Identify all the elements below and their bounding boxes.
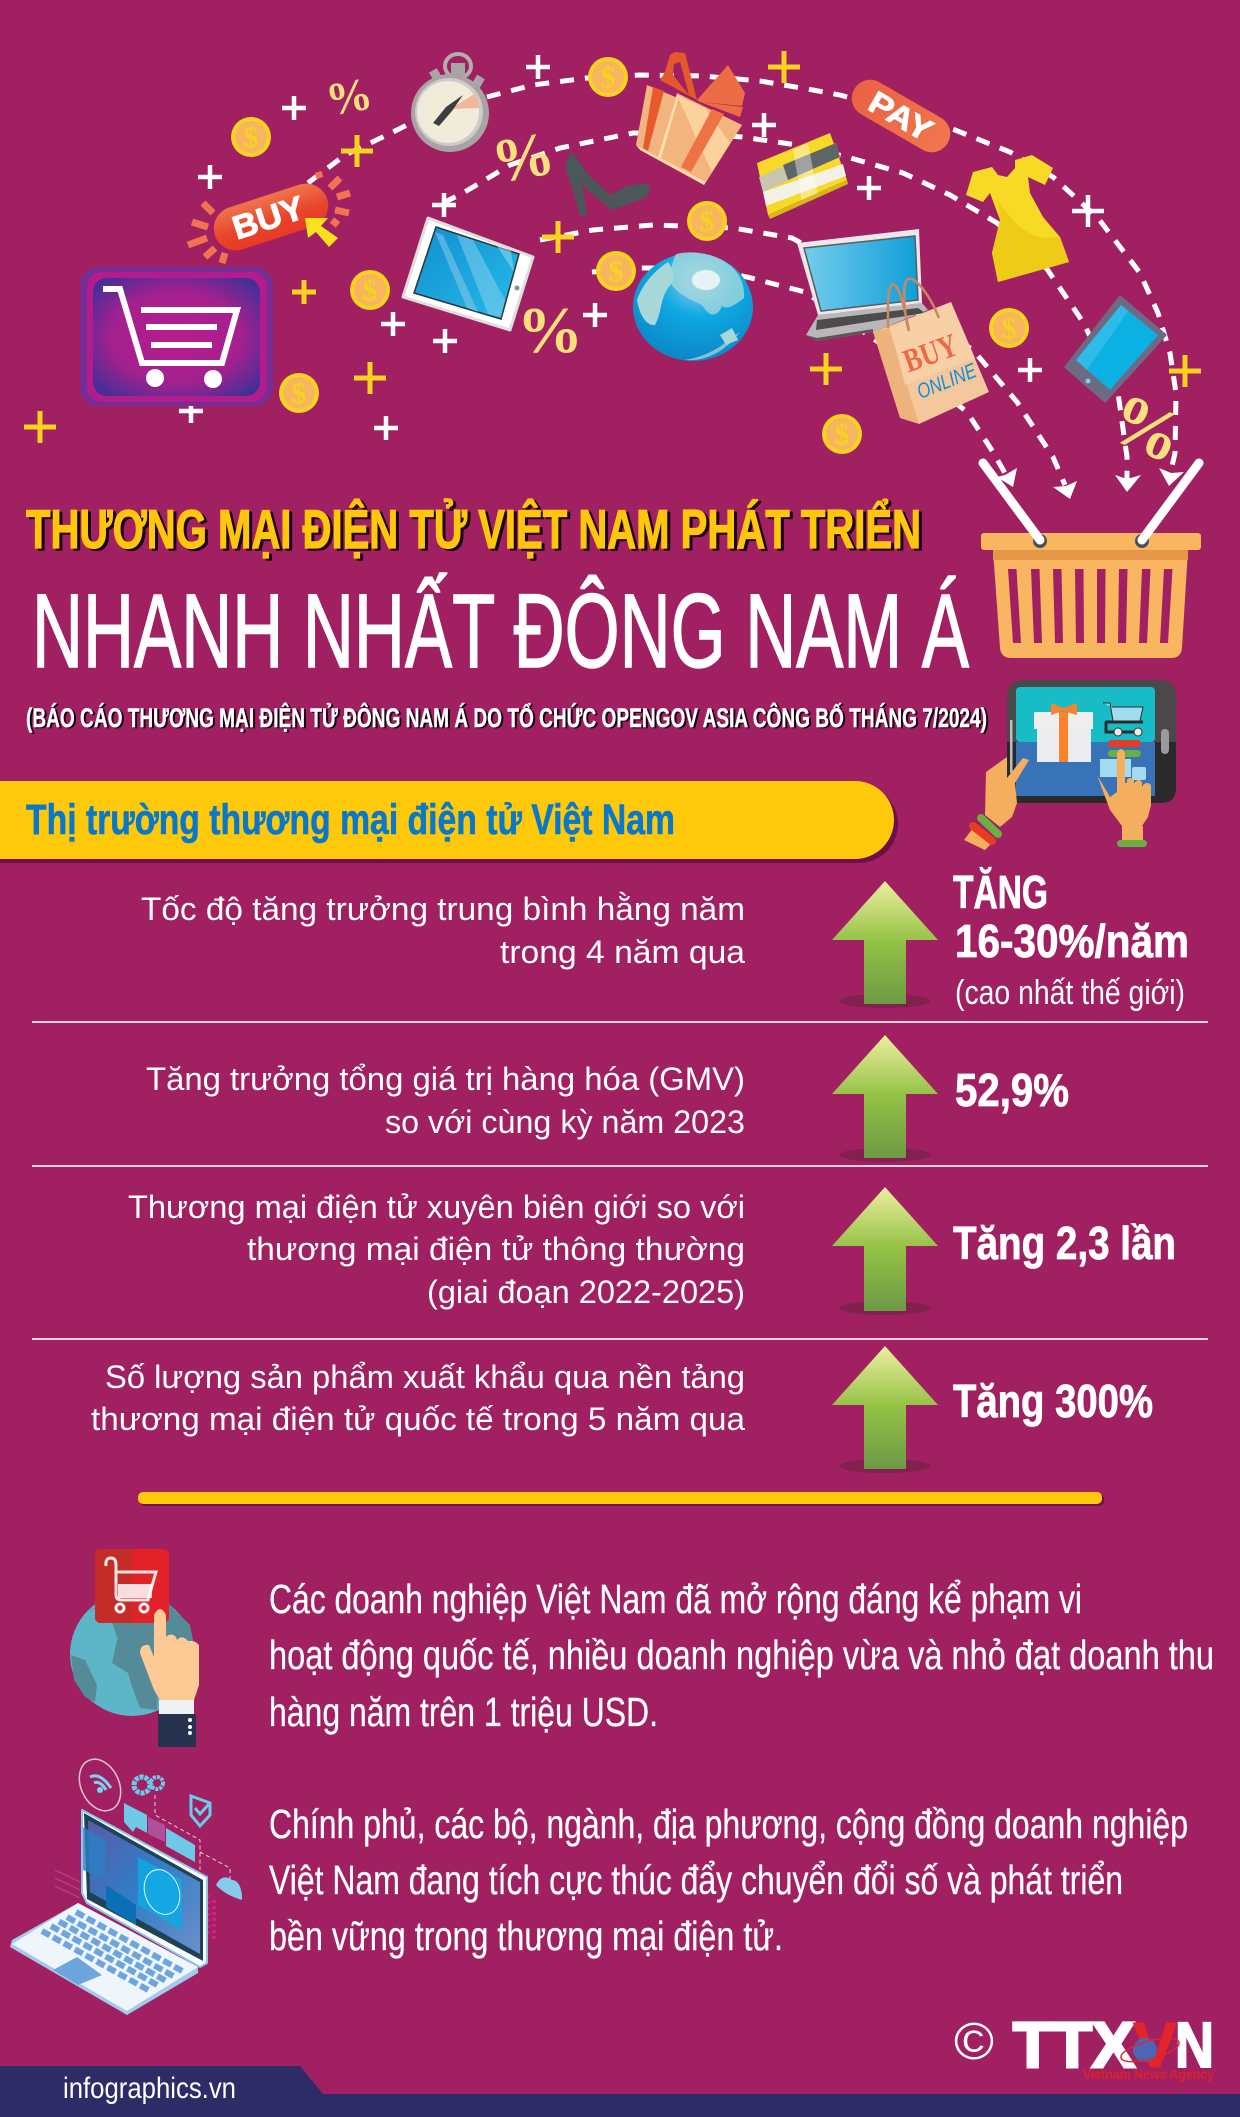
icon: laptop bbox=[797, 229, 928, 341]
icon: percent signs bbox=[322, 67, 1196, 479]
icon: percent signs: % bbox=[517, 294, 583, 367]
icon: yellow dress bbox=[966, 155, 1069, 282]
row 3: (giai đoạn 2022-2025) bbox=[427, 1274, 745, 1310]
row 1 bbox=[141, 866, 1189, 1012]
paragraph 1: hàng năm trên 1 triệu USD. bbox=[269, 1689, 658, 1735]
icon: globe bbox=[633, 252, 753, 361]
icon: coins: $ bbox=[700, 205, 714, 238]
row 3: thương mại điện tử thông thường bbox=[247, 1231, 745, 1267]
icon: gift box bbox=[636, 52, 745, 185]
icon: coins: $ bbox=[292, 377, 306, 410]
paragraph 1 bbox=[269, 1576, 1214, 1735]
row 1: Tốc độ tăng trưởng trung bình hằng năm bbox=[141, 891, 745, 927]
row 4: Tăng 300% bbox=[953, 1375, 1153, 1427]
icon: buy button: BUY bbox=[228, 189, 309, 246]
row 3: Tăng 2,3 lần bbox=[953, 1217, 1176, 1269]
row 1: (cao nhất thế giới) bbox=[955, 974, 1185, 1012]
copyright logo TTXVN bbox=[954, 2009, 1214, 2082]
icon: tablet with hands bbox=[964, 680, 1176, 850]
icon: high heel shoe bbox=[565, 152, 651, 216]
icon: percent signs: % bbox=[487, 119, 559, 197]
icon: pay button bbox=[845, 73, 957, 159]
icon: basket bbox=[981, 463, 1201, 658]
icon: credit card bbox=[757, 133, 848, 219]
row 1: trong 4 năm qua bbox=[500, 934, 745, 970]
copyright logo TTXVN: V bbox=[1133, 2009, 1177, 2081]
row 1: TĂNG bbox=[953, 866, 1048, 918]
icon: phone bbox=[1066, 297, 1165, 401]
footer bar bbox=[0, 2066, 1240, 2117]
copyright logo TTXVN: N bbox=[1175, 2009, 1214, 2081]
icon: globe with shopping touch bbox=[70, 1549, 199, 1747]
copyright logo TTXVN: © bbox=[954, 2013, 994, 2071]
icon: shopping cart tile bbox=[80, 267, 273, 406]
icon: coins: $ bbox=[600, 61, 616, 94]
icon: percent signs: % bbox=[322, 67, 376, 126]
row 2: so với cùng kỳ năm 2023 bbox=[385, 1104, 745, 1140]
section banner bbox=[0, 781, 898, 863]
row 1: 16-30%/năm bbox=[955, 915, 1189, 967]
icon: coins: $ bbox=[244, 121, 258, 154]
row 2: Tăng trưởng tổng giá trị hàng hóa (GMV) bbox=[146, 1061, 745, 1097]
copyright logo TTXVN: Vietnam News Agency bbox=[1083, 2066, 1214, 2082]
icon: buy button bbox=[188, 172, 350, 263]
paragraph 2: bền vững trong thương mại điện tử. bbox=[269, 1913, 783, 1959]
copyright logo TTXVN: TTX bbox=[1013, 2009, 1135, 2081]
row 4: thương mại điện tử quốc tế trong 5 năm qua bbox=[91, 1401, 745, 1437]
row 2: 52,9% bbox=[955, 1064, 1069, 1116]
icon: stopwatch bbox=[411, 54, 489, 152]
dashed paths bbox=[308, 75, 1176, 485]
row 2 bbox=[146, 1035, 1069, 1162]
yellow plus signs bbox=[24, 51, 1201, 443]
arrow heads bbox=[997, 468, 1184, 499]
white plus signs bbox=[179, 55, 1104, 440]
paragraph 2 bbox=[269, 1801, 1188, 1959]
icon: pay button: PAY bbox=[863, 84, 939, 149]
icon: coins: $ bbox=[834, 418, 850, 451]
title line 1: THƯƠNG MẠI ĐIỆN TỬ VIỆT NAM PHÁT TRIỂN bbox=[26, 498, 921, 560]
icon: shopping bag: BUY bbox=[899, 328, 963, 380]
footer bar: infographics.vn bbox=[63, 2072, 236, 2105]
row 3 bbox=[128, 1187, 1176, 1315]
yellow divider bar bbox=[138, 1492, 1104, 1506]
icon: tablet bbox=[403, 218, 533, 330]
icon: laptop with digital graphics bbox=[10, 1752, 242, 2015]
icon: coins: $ bbox=[608, 255, 624, 288]
icon: coins: $ bbox=[1002, 312, 1016, 345]
icon: shopping bag: ONLINE bbox=[914, 359, 981, 404]
row 4 bbox=[91, 1346, 1153, 1473]
row 4: Số lượng sản phẩm xuất khẩu qua nền tảng bbox=[105, 1359, 745, 1395]
icon: coins: $ bbox=[362, 274, 378, 307]
icon: percent signs: % bbox=[1098, 377, 1196, 479]
row 3: Thương mại điện tử xuyên biên giới so với bbox=[128, 1189, 745, 1225]
icon: shopping bag bbox=[873, 279, 989, 424]
icon: coins bbox=[231, 57, 1029, 454]
section banner: Thị trường thương mại điện tử Việt Nam bbox=[26, 796, 675, 844]
